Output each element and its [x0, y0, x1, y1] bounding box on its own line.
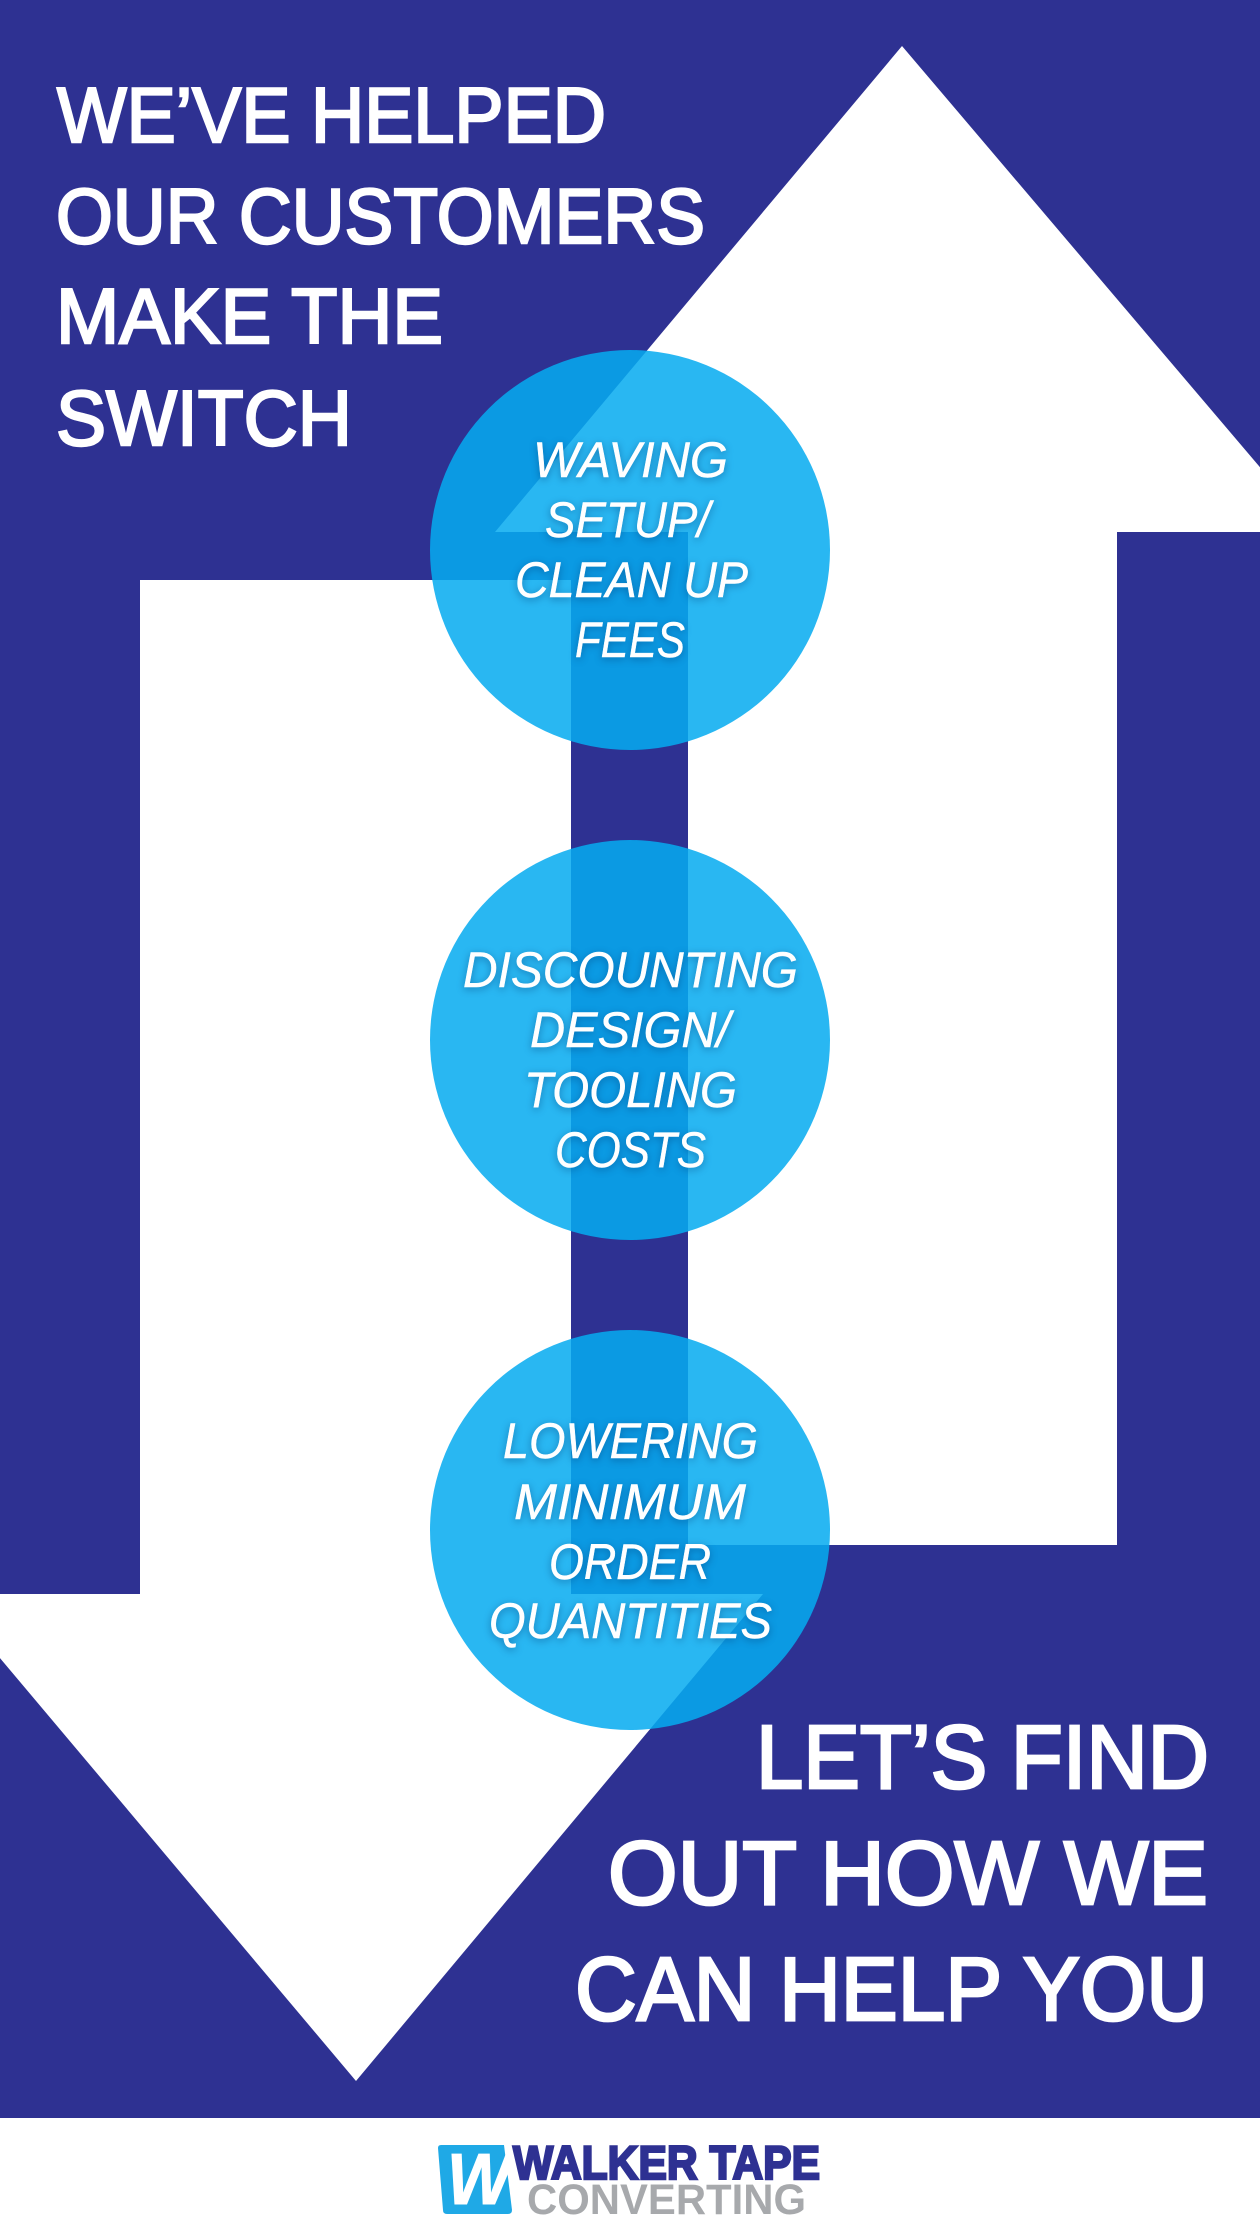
heading: top left: SWITCH — [56, 374, 352, 462]
circle: lowering minimum order quantities: MINIMUM — [514, 1474, 746, 1530]
heading: top left — [56, 71, 705, 462]
logo: Walker Tape Converting — [438, 2136, 820, 2224]
circle: discounting design and tooling costs: COSTS — [555, 1122, 706, 1178]
arrow: white down arrow — [0, 580, 763, 2081]
circle: waving setup and clean up fees: SETUP/ — [545, 492, 715, 548]
circle: lowering minimum order quantities: QUANTITIES — [489, 1593, 772, 1649]
circle: discounting design and tooling costs — [430, 840, 830, 1240]
heading: bottom right: OUT HOW WE — [608, 1824, 1208, 1924]
circle: waving setup and clean up fees — [430, 350, 830, 750]
logo: Walker Tape Converting: WALKER TAPE — [513, 2136, 820, 2189]
heading: top left: OUR CUSTOMERS — [56, 172, 705, 260]
circle: lowering minimum order quantities: ORDER — [549, 1534, 711, 1590]
heading: bottom right: LET’S FIND — [756, 1708, 1209, 1808]
circle: discounting design and tooling costs: DESIGN/ — [530, 1002, 735, 1058]
circle: waving setup and clean up fees: FEES — [575, 612, 685, 668]
heading: bottom right — [575, 1708, 1209, 2040]
circle: discounting design and tooling costs: TOOLING — [524, 1062, 737, 1118]
logo: Walker Tape Converting: CONVERTING — [527, 2176, 806, 2224]
heading: top left: WE’VE HELPED — [57, 71, 606, 159]
arrow: white up arrow — [495, 46, 1260, 1545]
icon: W badge: W — [447, 2140, 517, 2220]
circle: lowering minimum order quantities — [430, 1330, 830, 1730]
circle: lowering minimum order quantities: LOWERING — [503, 1413, 758, 1469]
heading: top left: MAKE THE — [56, 272, 443, 360]
circle: discounting design and tooling costs: DISCOUNTING — [463, 942, 798, 998]
heading: bottom right: CAN HELP YOU — [575, 1940, 1208, 2040]
circle: waving setup and clean up fees: WAVING — [533, 432, 728, 488]
circle: waving setup and clean up fees: CLEAN UP — [515, 552, 749, 608]
